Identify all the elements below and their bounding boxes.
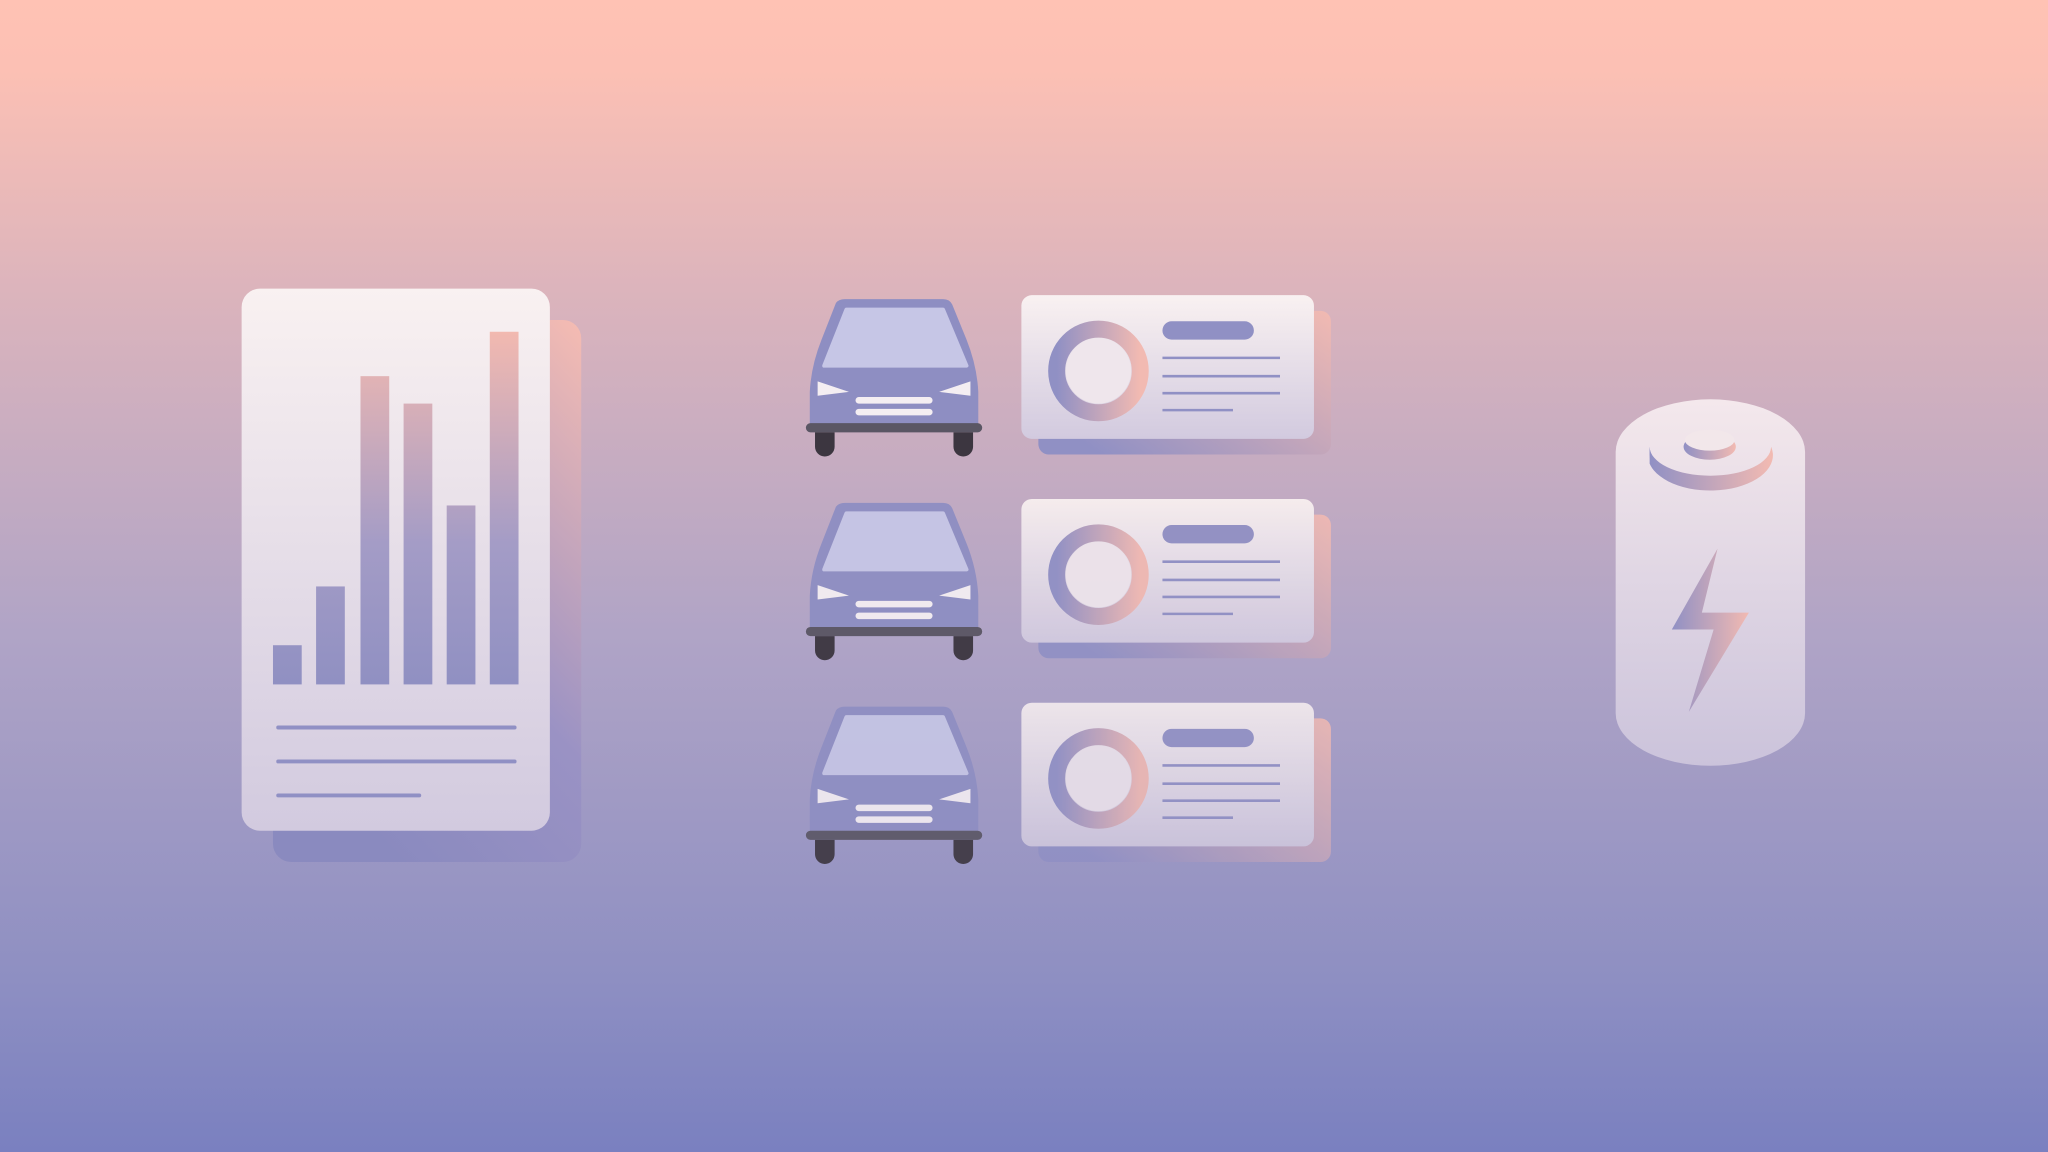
- icon: car 3: [806, 707, 982, 864]
- icon: battery: [1616, 399, 1805, 766]
- text lines: [278, 728, 515, 795]
- icon: car 2: [806, 503, 982, 660]
- card 3: [1021, 703, 1331, 862]
- card 1: [1021, 295, 1331, 455]
- panel: report document with bar chart: [242, 289, 581, 862]
- icon: car 1: [806, 299, 982, 456]
- bar chart: [273, 332, 519, 684]
- card 2: [1021, 499, 1331, 658]
- icon: lightning bolt: [1672, 549, 1749, 712]
